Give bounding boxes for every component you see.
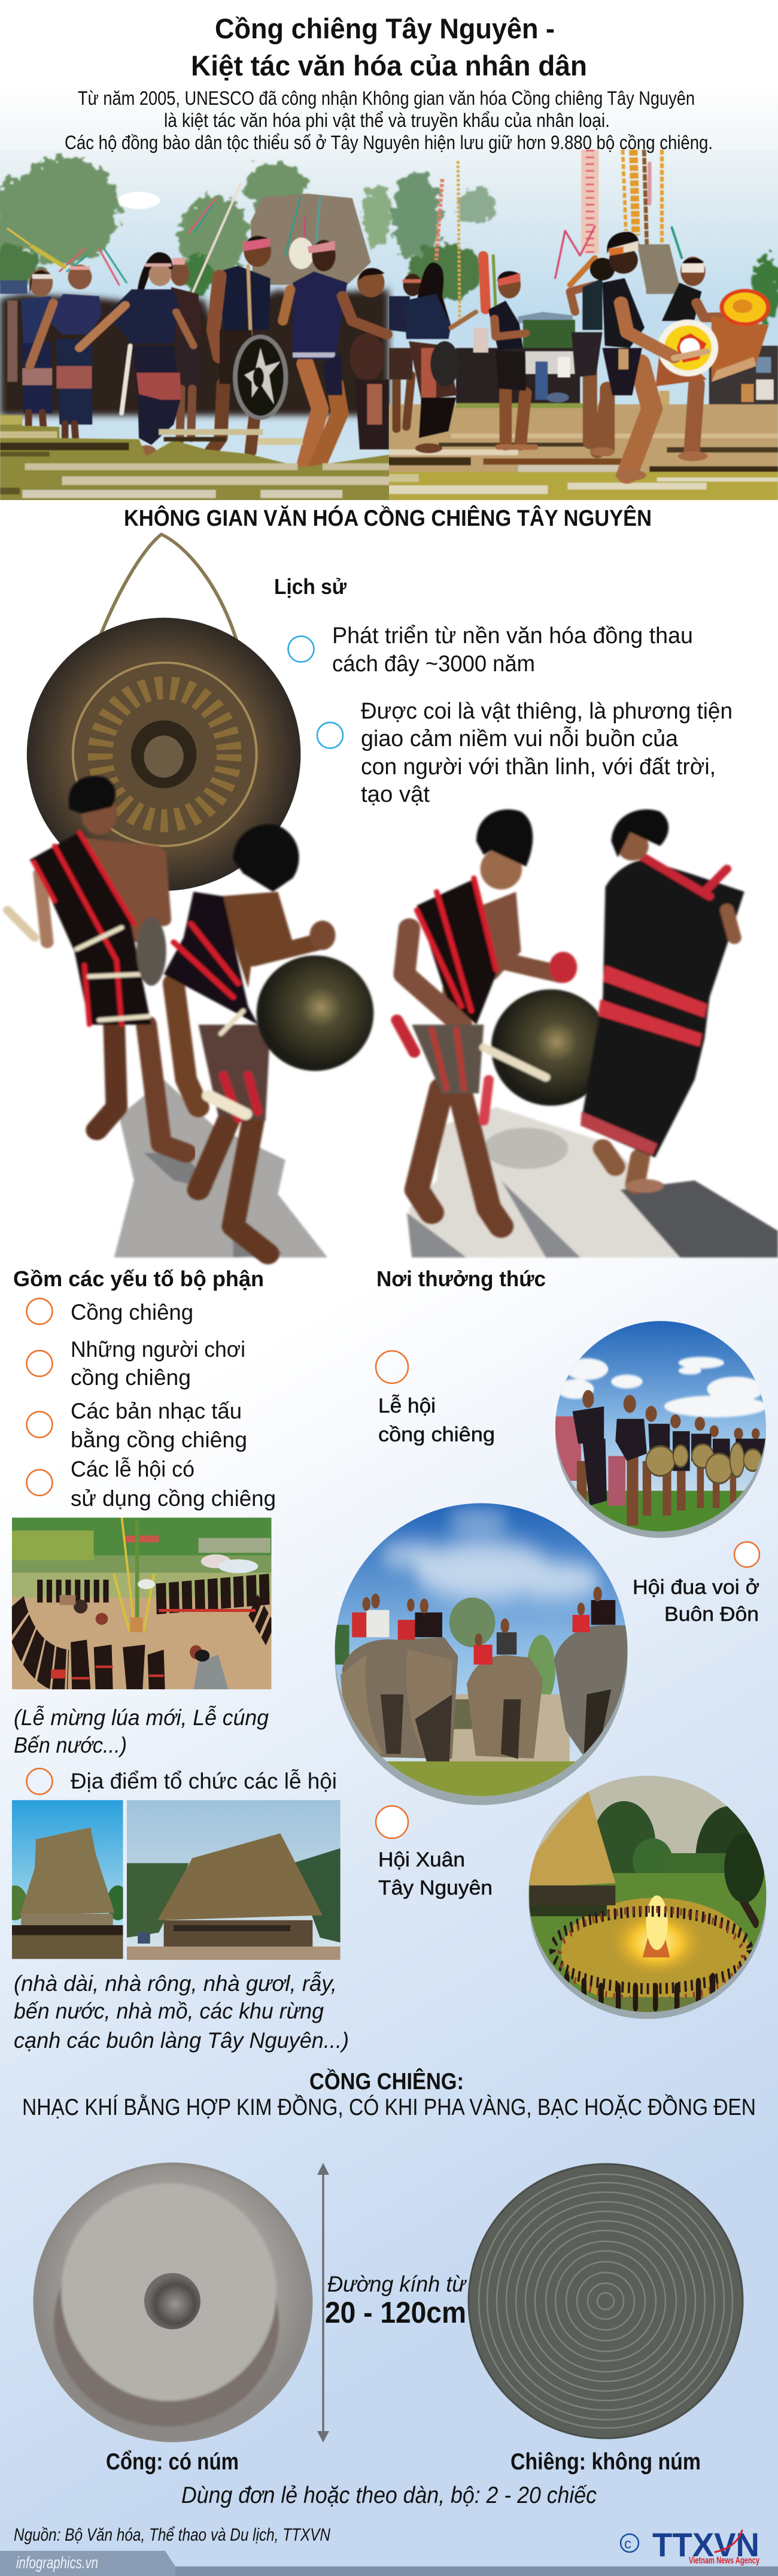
bullet: gongs: Cồng chiêng <box>71 1300 193 1325</box>
man with gong <box>211 235 286 451</box>
man navy back <box>283 240 387 465</box>
player with gong centre <box>164 825 373 1254</box>
icon: bossed gong (cong) <box>35 2164 311 2441</box>
woman left <box>21 269 53 428</box>
logo: TTXVN: TTXVN <box>652 2526 759 2563</box>
title: Cồng chiêng Tây Nguyên - <box>215 13 555 44</box>
bullet: venues: Địa điểm tổ chức các lễ hội <box>71 1769 337 1793</box>
round photo: elephant race <box>332 1501 633 1805</box>
arrow: diameter <box>317 2163 329 2442</box>
spectators <box>455 327 778 405</box>
white fade over the top of the photo <box>0 84 778 150</box>
caption: venues: (nhà dài, nhà rông, nhà gươl, rẫy, <box>14 1971 337 1996</box>
bullet: players: cồng chiêng <box>71 1365 191 1390</box>
heading: history: Lịch sử <box>274 574 347 599</box>
round photo: spring festival bonfire <box>527 1774 768 2022</box>
label: gong festival: Lễ hội <box>378 1395 436 1417</box>
gong description heading: CỒNG CHIÊNG: <box>309 2068 464 2095</box>
heading: where to enjoy: Nơi thưởng thức <box>376 1266 546 1291</box>
footer band: infographics.vn <box>16 2553 98 2572</box>
bullet: music: Các bản nhạc tấu <box>71 1399 242 1423</box>
gong description heading <box>22 2068 756 2120</box>
panel: gong and players photo cut-out <box>7 534 778 1257</box>
bullet: players: Những người chơi <box>71 1337 245 1362</box>
caption: venues: cạnh các buôn làng Tây Nguyên...) <box>14 2028 349 2053</box>
ground <box>384 403 778 501</box>
label: elephant race: Hội đua voi ở <box>633 1576 759 1599</box>
bullet: music <box>26 1399 247 1452</box>
label: spring festival: Tây Nguyên <box>378 1877 493 1899</box>
intro paragraph: là kiệt tác văn hóa phi vật thể và truyền khẩu của nhân loại. <box>164 110 610 131</box>
page background <box>0 1245 778 2576</box>
footer band <box>0 2551 778 2576</box>
heading: components: Gồm các yếu tố bộ phận <box>13 1266 264 1291</box>
decorative flag poles <box>436 150 682 321</box>
dancer left <box>389 262 476 453</box>
bullet: history 2: giao cảm niềm vui nỗi buồn của <box>361 726 679 751</box>
bullet: gongs <box>26 1298 193 1325</box>
ground shadows <box>114 1080 778 1257</box>
bullet: history 2: tạo vật <box>361 782 430 807</box>
man behind drum <box>570 258 615 451</box>
bullet: history 1 <box>288 623 693 677</box>
bullet: festivals: Các lễ hội có <box>71 1457 194 1481</box>
woman dancer centre <box>80 252 193 458</box>
gong labels: Cổng: có núm <box>106 2449 239 2475</box>
player with gong left <box>7 776 186 1153</box>
caption: venues <box>14 1971 349 2053</box>
round photo: gong players on grass <box>552 1317 770 1538</box>
ground <box>0 414 394 501</box>
caption: venues: bến nước, nhà mồ, các khu rừng <box>14 1999 324 2023</box>
intro paragraph <box>65 87 713 153</box>
panel: where to enjoy <box>376 1266 759 1899</box>
section heading: KHÔNG GIAN VĂN HÓA CỒNG CHIÊNG TÂY NGUYÊN <box>124 504 652 531</box>
bullet: history 2 <box>317 699 733 807</box>
panel: history <box>274 574 733 807</box>
label: spring festival <box>376 1806 493 1899</box>
diameter label <box>325 2272 467 2329</box>
label: gong festival: cồng chiêng <box>378 1423 495 1446</box>
source: Nguồn: Bộ Văn hóa, Thể thao và Du lịch, TTXVN <box>14 2525 330 2545</box>
panel: components list <box>13 1266 349 2053</box>
man behind <box>171 258 201 440</box>
bullet: festivals <box>26 1457 276 1511</box>
title <box>191 13 587 81</box>
drummer right <box>661 256 725 462</box>
caption: festivals: Bến nước...) <box>14 1733 127 1757</box>
photo: stilt longhouse <box>127 1800 341 1960</box>
caption: festivals: (Lễ mừng lúa mới, Lễ cúng <box>14 1705 269 1730</box>
bullet: history 1: Phát triển từ nền văn hóa đồng thau <box>332 623 693 648</box>
woman second <box>30 265 102 440</box>
diameter label: Đường kính từ <box>327 2272 467 2296</box>
main drummer <box>590 232 707 481</box>
icon: hanging gong <box>27 534 300 891</box>
man centre <box>488 271 536 447</box>
bullet: music: bằng cồng chiêng <box>71 1428 247 1452</box>
label: elephant race <box>633 1542 759 1626</box>
photo: communal house <box>12 1800 123 1959</box>
hero photo: festival dancers <box>0 84 778 501</box>
label: gong festival <box>376 1351 495 1446</box>
big drums <box>656 289 770 386</box>
bullet: players <box>26 1337 245 1390</box>
bullet: festivals: sử dụng cồng chiêng <box>71 1486 276 1511</box>
diameter label: 20 - 120cm <box>325 2296 466 2329</box>
label: elephant race: Buôn Đôn <box>664 1603 759 1626</box>
riders <box>352 1587 615 1665</box>
usage note: Dùng đơn lẻ hoặc theo dàn, bộ: 2 - 20 chiếc <box>181 2483 597 2508</box>
gong labels <box>106 2449 701 2475</box>
photo: rice festival ring <box>12 1516 272 1689</box>
icon: flat gong (chieng) <box>468 2163 743 2439</box>
bullet: history 1: cách đây ~3000 năm <box>332 651 535 677</box>
ring of people <box>552 1910 750 2001</box>
man right edge <box>350 268 389 449</box>
player with gong right <box>397 810 610 1226</box>
title: Kiệt tác văn hóa của nhân dân <box>191 50 587 81</box>
bullet: history 2: Được coi là vật thiêng, là phương tiện <box>361 699 733 724</box>
logo: TTXVN: c <box>624 2536 631 2552</box>
bullet: history 2: con người với thần linh, với đất trời, <box>361 754 716 780</box>
label: spring festival: Hội Xuân <box>378 1848 465 1871</box>
woman in black dress <box>581 810 744 1193</box>
caption: festivals <box>14 1705 269 1757</box>
gong labels: Chiêng: không núm <box>510 2449 701 2475</box>
